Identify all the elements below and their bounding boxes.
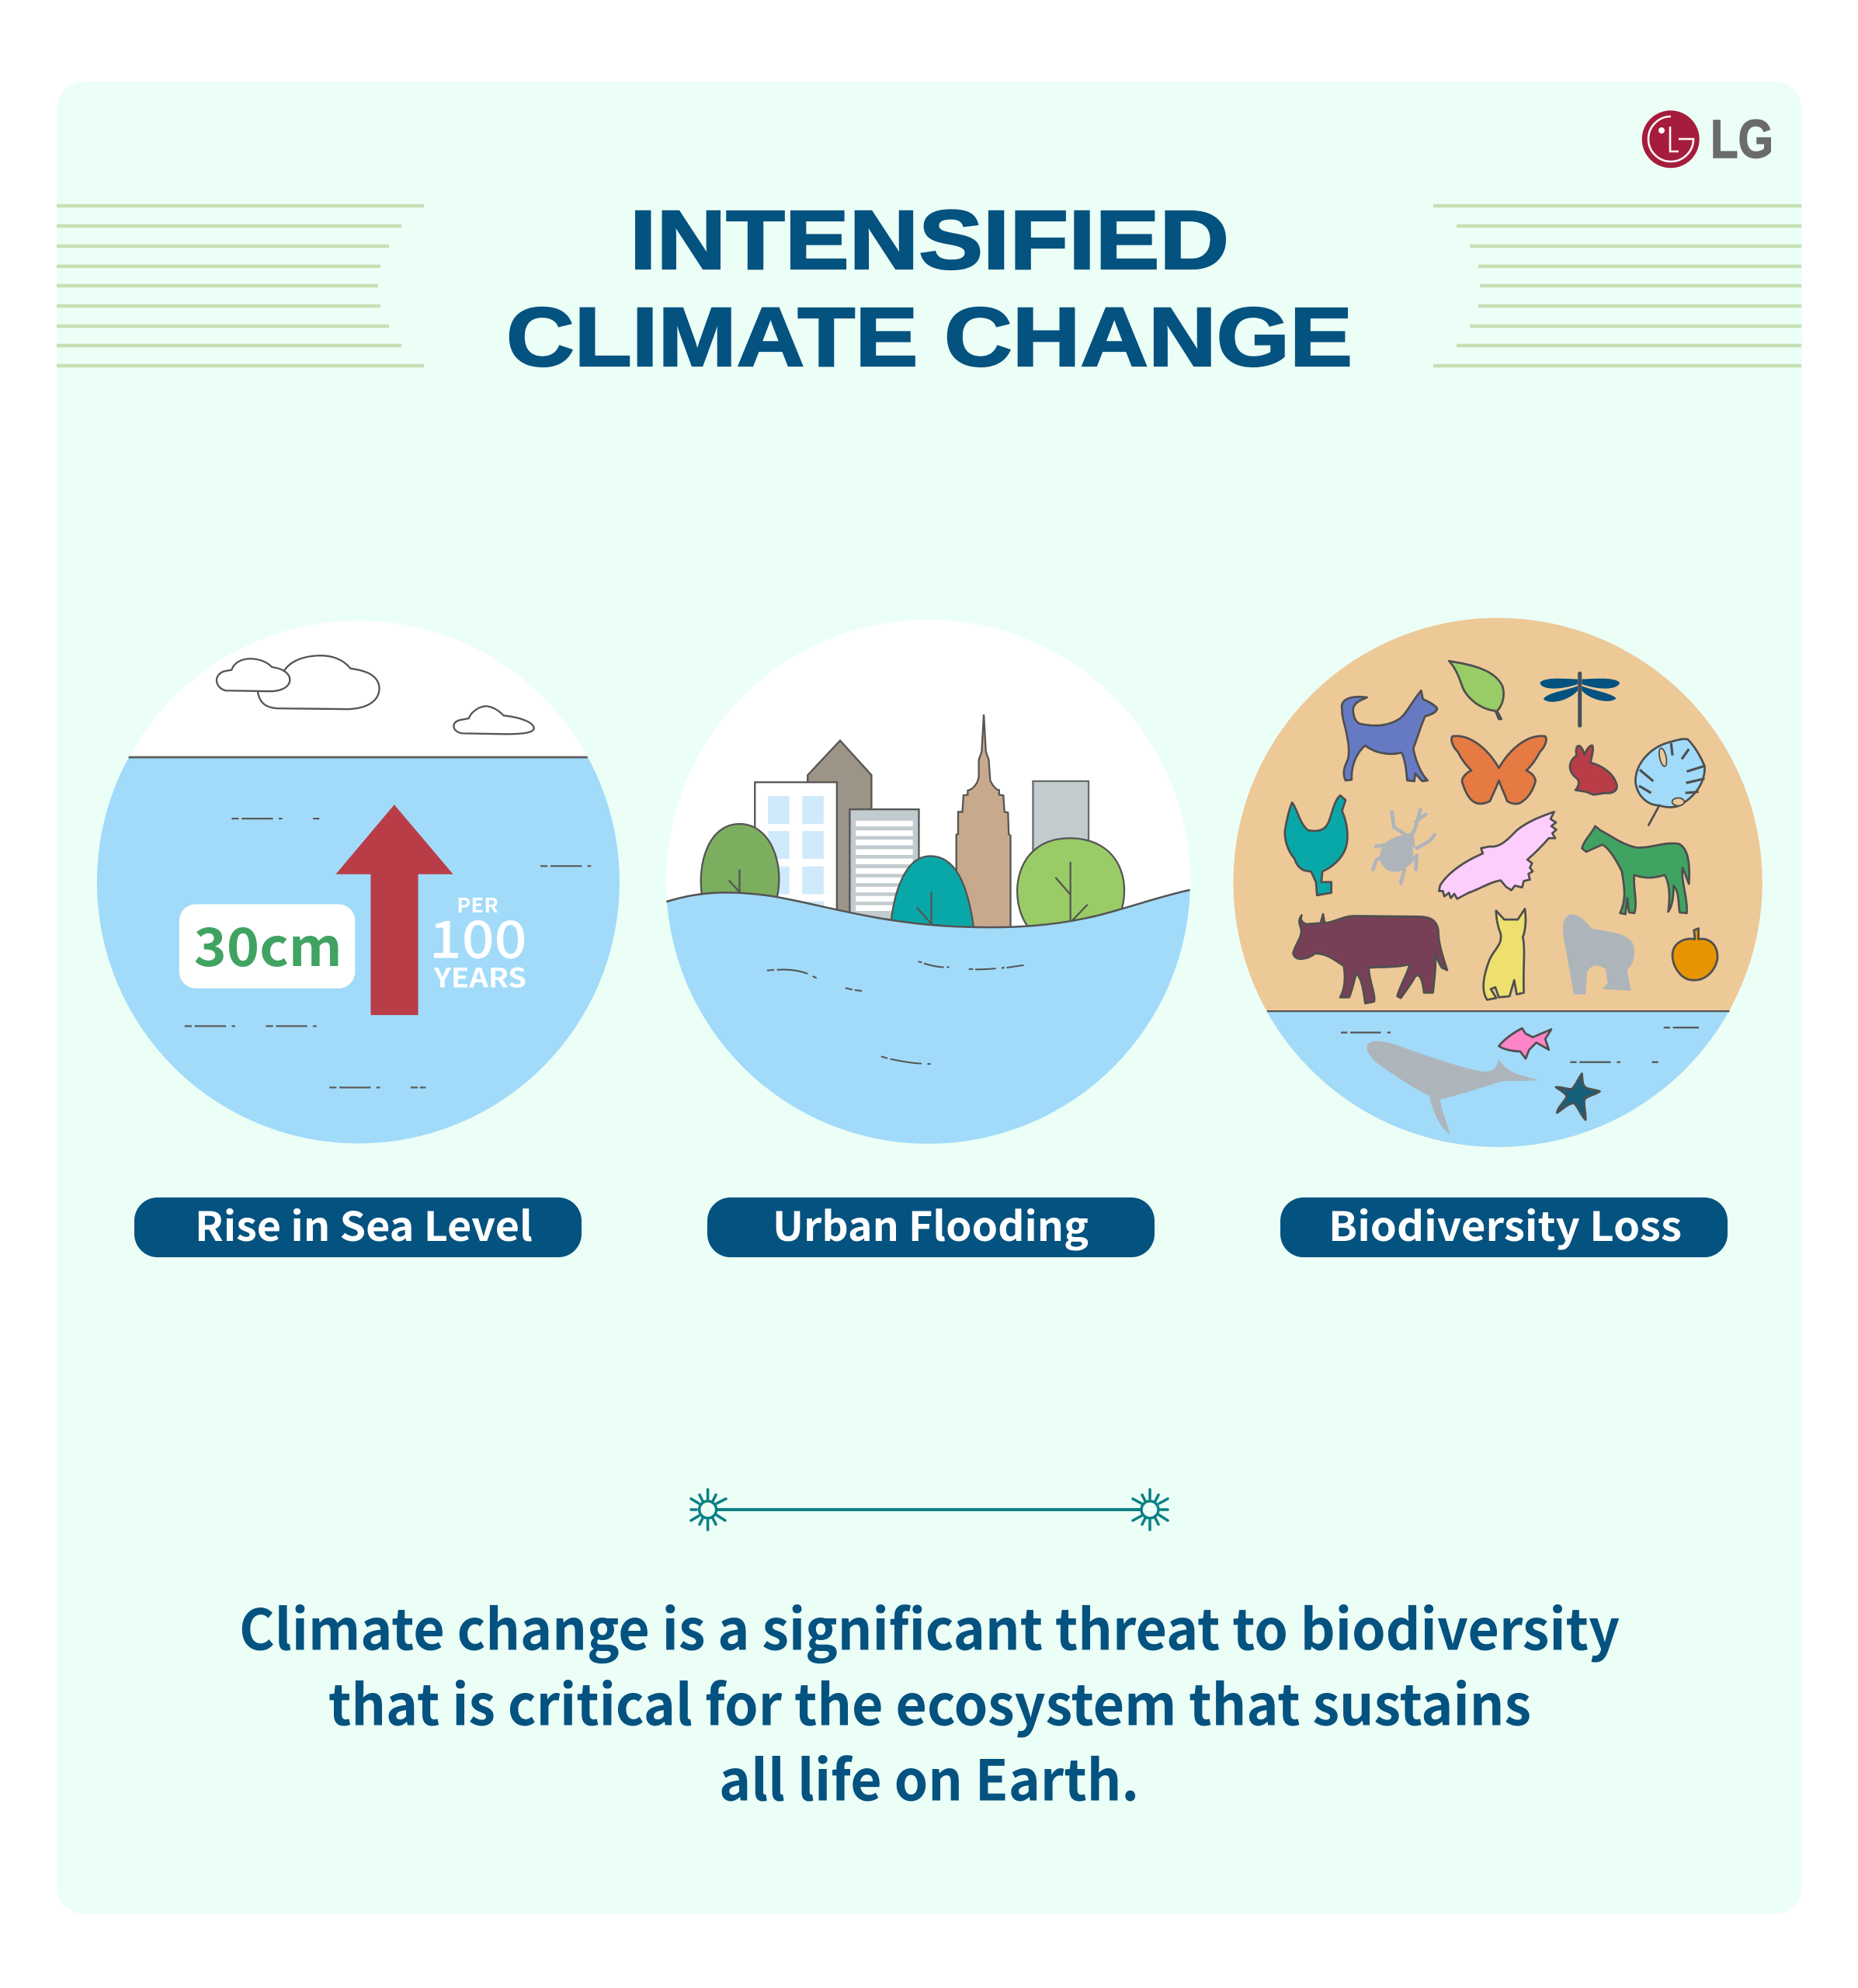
beetle (1373, 810, 1435, 883)
panel: urban flooding (663, 620, 1198, 1148)
leaf (1449, 661, 1504, 719)
title: INTENSIFIED (630, 193, 1229, 287)
cat (1484, 909, 1526, 999)
closing statement: that is critical for the ecosystem that sustains (328, 1660, 1531, 1741)
ripples (1341, 1027, 1699, 1062)
cow (1294, 914, 1447, 1003)
horse (1582, 826, 1690, 914)
monstera leaf (1635, 739, 1705, 825)
divider with suns (691, 1489, 1168, 1530)
closing statement: all life on Earth. (719, 1735, 1139, 1817)
eagle (1439, 812, 1556, 898)
label: urban flooding: Urban Flooding (773, 1194, 1089, 1253)
label: rise in sea level: Rise in Sea Level (195, 1194, 533, 1253)
label: biodiversity loss: Biodiversity Loss (1328, 1194, 1682, 1253)
decorative lines right (1433, 206, 1801, 366)
whale (1367, 1041, 1538, 1135)
decorative lines left (57, 206, 424, 366)
clouds (217, 655, 534, 734)
hen (1285, 795, 1347, 895)
fish (1499, 1028, 1551, 1058)
LG logo (1642, 109, 1773, 169)
gorilla (1563, 914, 1634, 995)
dog (1342, 690, 1437, 781)
apple (1672, 929, 1717, 980)
label: rise in sea level (134, 1194, 582, 1257)
title (506, 193, 1353, 384)
starfish (1556, 1073, 1599, 1120)
water (78, 757, 637, 1149)
butterfly (1452, 736, 1546, 804)
30cm callout: 30cm (194, 905, 342, 982)
panel: rise in sea level (78, 620, 637, 1149)
label: urban flooding (707, 1194, 1155, 1257)
per 100 years label: PER (457, 890, 498, 919)
dragonfly (1540, 673, 1620, 725)
water ripples (185, 818, 591, 1087)
sea (1267, 1011, 1728, 1148)
LG logo: LG (1710, 109, 1773, 169)
water ripples (767, 961, 1023, 1064)
per 100 years label: 100 (429, 899, 527, 974)
trees (701, 824, 1124, 929)
flood water (663, 888, 1198, 1148)
buildings (755, 714, 1089, 929)
closing statement: Climate change is a significant threat to biodiversity (239, 1584, 1620, 1667)
arrow (335, 805, 453, 1015)
panel: biodiversity loss (1219, 618, 1779, 1154)
per 100 years label: YEARS (433, 956, 526, 995)
animals and plants (1285, 661, 1717, 1135)
title: CLIMATE CHANGE (506, 290, 1353, 384)
rabbit (1570, 746, 1617, 794)
closing statement (239, 1584, 1620, 1817)
per 100 years label (429, 890, 527, 995)
label: biodiversity loss (1280, 1194, 1728, 1257)
